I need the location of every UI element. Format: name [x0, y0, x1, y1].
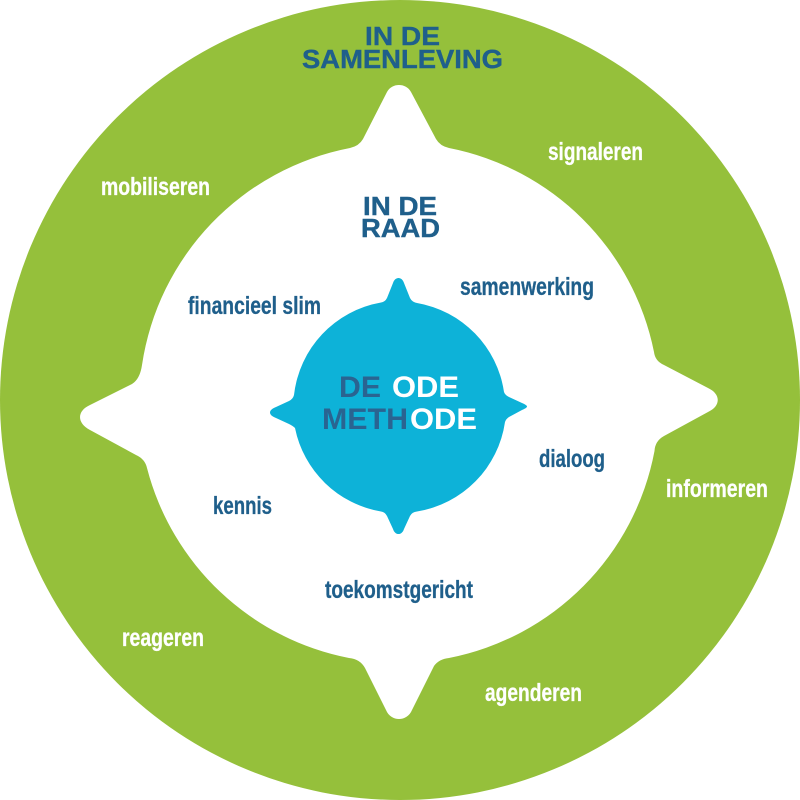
- council labels: kennis: [213, 492, 272, 520]
- central title: DE: [339, 371, 381, 404]
- society labels: reageren: [122, 624, 204, 652]
- central title: METH: [322, 403, 408, 436]
- heading: in de raad: RAAD: [361, 213, 440, 243]
- society labels: [101, 138, 768, 707]
- council labels: dialoog: [539, 445, 605, 473]
- central title: [322, 371, 477, 436]
- heading: in de samenleving: [302, 21, 503, 74]
- society labels: mobiliseren: [101, 173, 210, 201]
- society labels: agenderen: [485, 679, 582, 707]
- council labels: financieel slim: [188, 292, 321, 320]
- heading: in de samenleving: SAMENLEVING: [302, 44, 503, 74]
- council labels: samenwerking: [460, 273, 594, 301]
- heading: in de raad: [361, 191, 440, 243]
- society labels: signaleren: [548, 138, 643, 166]
- central blue compass: [270, 278, 527, 534]
- central title: ODE: [410, 403, 477, 436]
- council labels: toekomstgericht: [325, 576, 474, 604]
- white inner compass shape: [80, 85, 718, 719]
- society labels: informeren: [666, 475, 768, 503]
- central title: ODE: [392, 371, 459, 404]
- heading: in de raad: IN DE: [363, 191, 437, 221]
- heading: in de samenleving: IN DE: [365, 21, 440, 51]
- council labels: [188, 273, 605, 604]
